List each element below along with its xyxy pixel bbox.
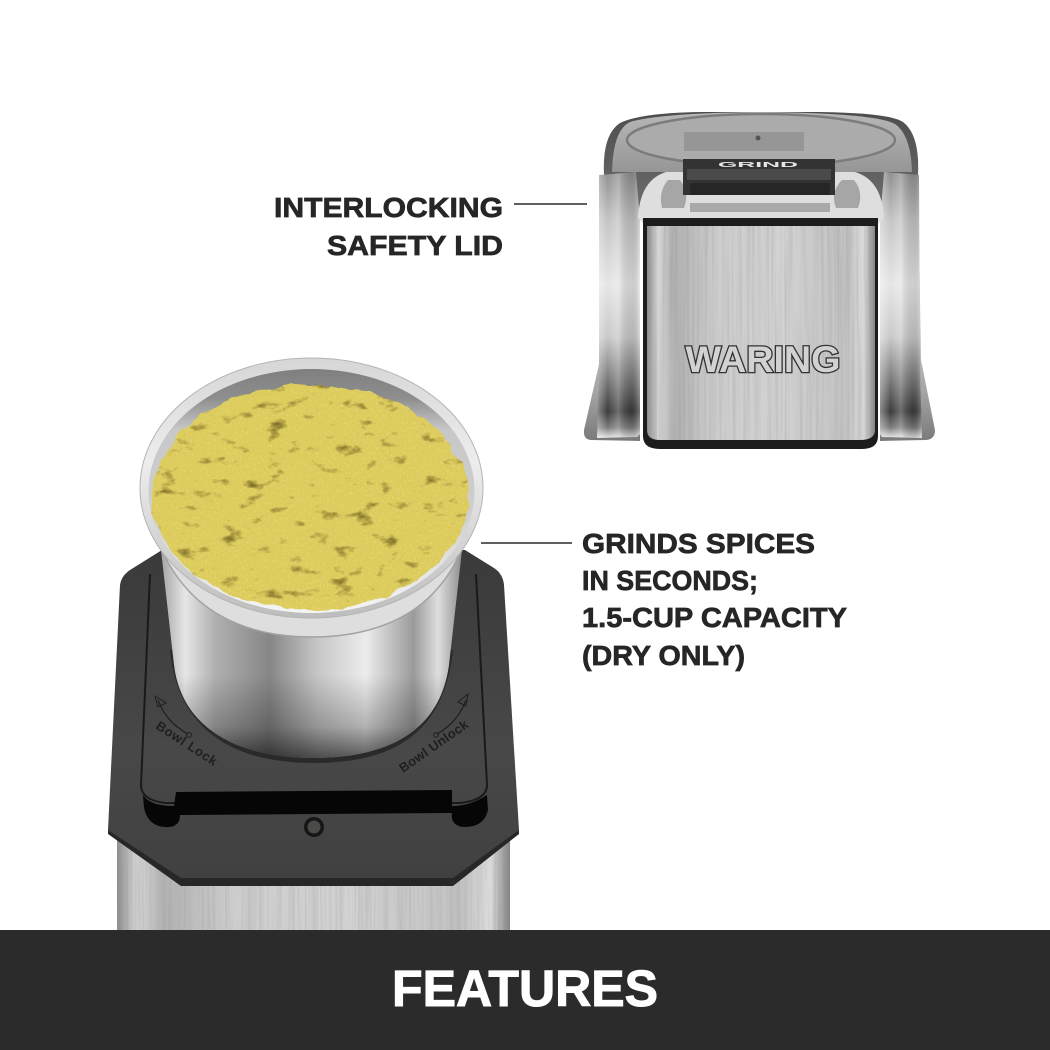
bowl rim [140,358,483,618]
callout: interlocking safety lid: SAFETY LID [327,230,503,261]
callout: interlocking safety lid: INTERLOCKING [274,192,503,223]
clear collar [638,172,884,224]
lid outer shell [584,112,935,441]
lid round window [627,114,895,166]
stainless steel housing [117,835,510,931]
bowl unlock marking: Bowl Unlock [396,716,472,775]
slot [143,790,488,827]
left clear pillar [597,172,640,438]
bowl lock marking: Bowl Lock [153,718,221,769]
Waring logo: WARING [686,339,840,380]
steel bowl body [161,550,462,758]
callout: grinds spices: 1.5-CUP CAPACITY [582,602,847,633]
callout: grinds spices: (DRY ONLY) [582,640,745,671]
banner title: FEATURES [392,960,658,1017]
product photo: safety lid [584,112,935,449]
spice powder [152,384,468,610]
grind switch [683,159,835,195]
grind switch: GRIND [718,160,800,169]
footer banner [0,930,1050,1050]
stainless steel block [643,218,878,449]
bowl lock marking [153,696,221,769]
bowl opening shadow [170,650,453,763]
callout: grinds spices [481,528,847,671]
Waring logo: WARING [686,339,840,380]
lid top surface [612,112,912,172]
black octagonal top plate [108,550,519,884]
bowl lip [161,548,462,637]
bowl inner wall [148,369,474,613]
callout: grinds spices: IN SECONDS; [582,565,758,596]
callout: grinds spices: GRINDS SPICES [582,528,815,559]
product photo: grinder base and bowl [108,358,519,931]
recessed panel outline [141,574,487,803]
right clear pillar [880,172,922,438]
callout: interlocking safety lid [274,192,587,261]
indicator hole [304,817,324,837]
